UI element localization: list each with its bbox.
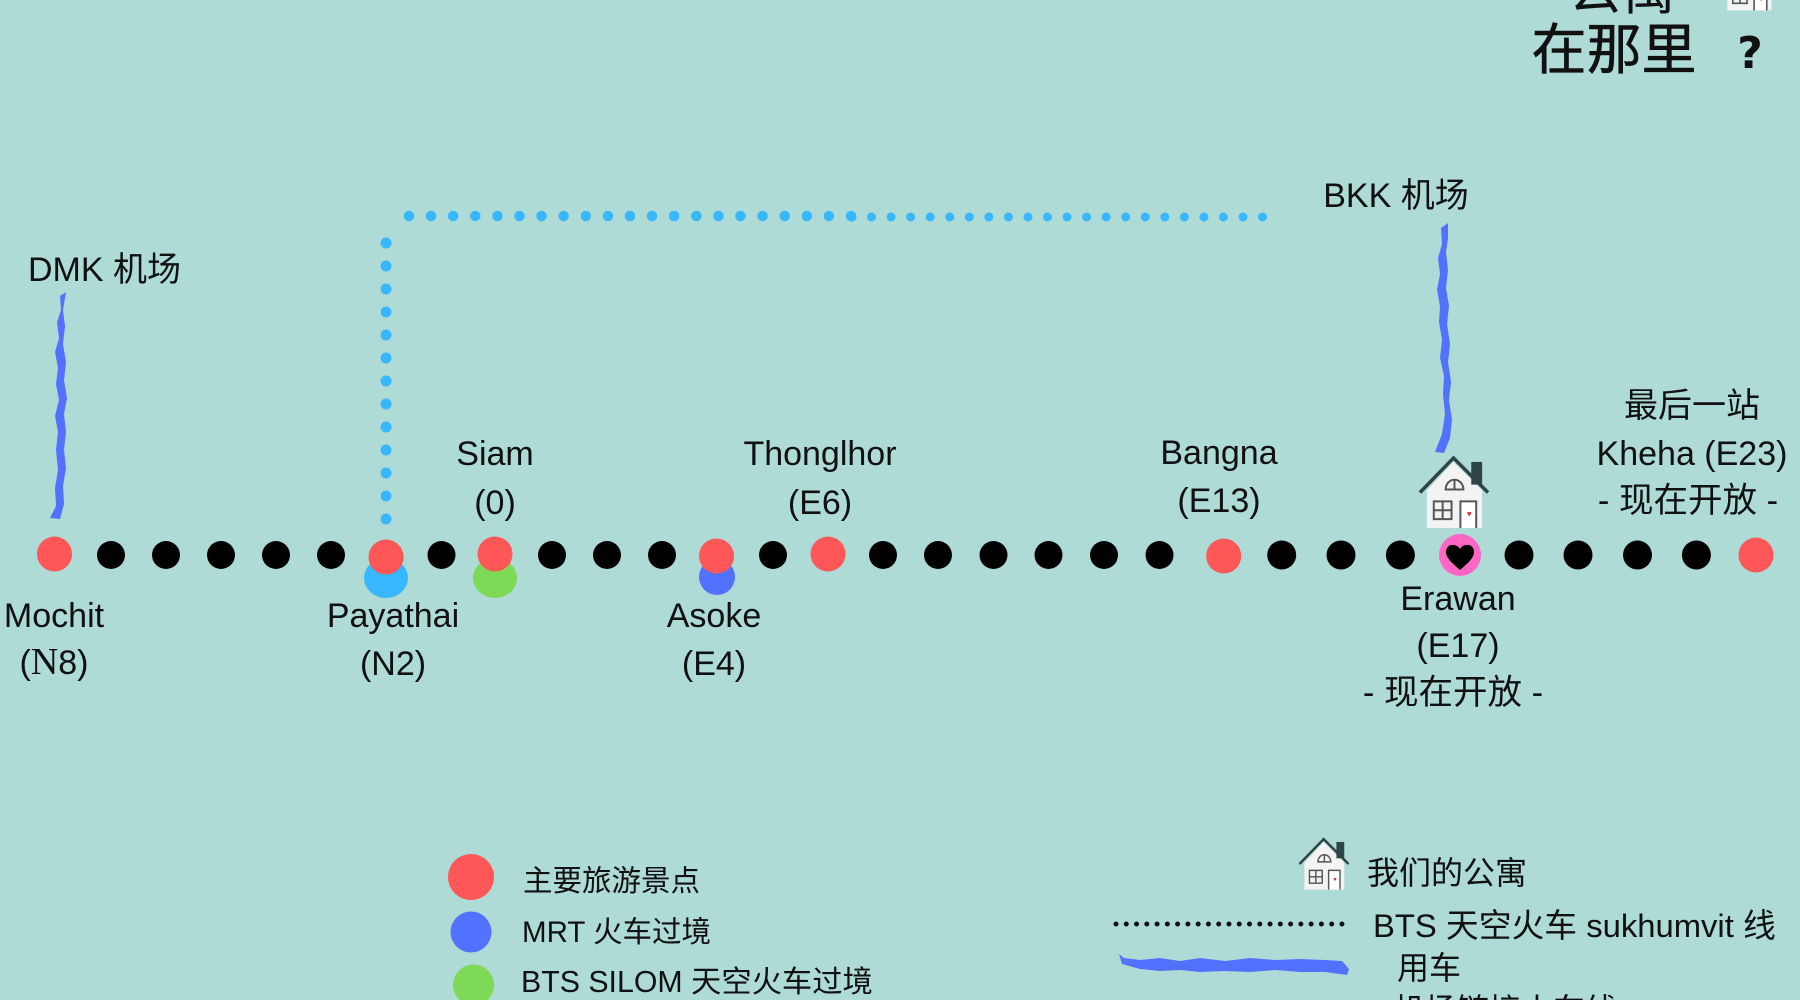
label: Kheha: - 现在开放 - <box>1598 482 1778 520</box>
label: Asoke: Asoke <box>667 597 761 635</box>
legend item: MRT <box>450 912 711 952</box>
label: Mochit <box>4 597 105 683</box>
legend item: BTS Sukhumvit: BTS 天空火车 sukhumvit 线 <box>1373 907 1776 944</box>
legend item: our apartment <box>1299 839 1527 891</box>
title <box>1531 0 1776 81</box>
label: Erawan <box>1363 580 1543 712</box>
label: Bangna: (E13) <box>1177 482 1261 520</box>
label: Asoke <box>667 597 761 683</box>
label: Thonglhor: Thonglhor <box>743 435 897 473</box>
legend item: BTS Silom: BTS SILOM 天空火车过境 <box>521 965 873 999</box>
label: Mochit: (N8) <box>19 641 89 683</box>
label: Bangna: Bangna <box>1160 434 1278 472</box>
legend: right <box>1116 839 1776 1000</box>
legend item: tourist attractions: 主要旅游景点 <box>523 865 700 898</box>
label: Payathai <box>327 597 459 683</box>
label: Siam: Siam <box>456 435 534 473</box>
legend item: our apartment: 我们的公寓 <box>1367 855 1527 891</box>
question mark: ? <box>1737 28 1763 79</box>
label: Mochit: Mochit <box>4 597 105 635</box>
label: Kheha: 最后一站 <box>1624 387 1760 425</box>
transfer markers <box>364 558 735 598</box>
our apartment marker <box>1439 534 1481 576</box>
label: Bangna <box>1160 434 1278 520</box>
title: 在那里 <box>1531 19 1697 81</box>
legend item: tourist attractions <box>448 854 700 900</box>
label: Thonglhor: (E6) <box>788 484 852 522</box>
label: Erawan: Erawan <box>1400 580 1516 618</box>
station line <box>37 536 1774 574</box>
legend item: by car: 用车 <box>1397 950 1461 986</box>
legend item: MRT: MRT 火车过境 <box>522 916 711 949</box>
label: DMK airport: DMK 机场 <box>28 251 181 289</box>
label: Erawan: (E17) <box>1416 627 1500 665</box>
label: Thonglhor <box>743 435 897 522</box>
route: BKK airport wavy line <box>1435 223 1452 453</box>
label: Siam <box>456 435 534 522</box>
label: Kheha <box>1597 387 1787 520</box>
label: Siam: (0) <box>474 484 516 522</box>
label: Erawan: - 现在开放 - <box>1363 674 1543 712</box>
route: DMK airport wavy line <box>50 292 67 519</box>
icon: house above Erawan <box>1420 458 1488 528</box>
label: Kheha: Kheha (E23) <box>1597 435 1787 473</box>
icon: house in title <box>1722 0 1776 10</box>
label: Payathai: Payathai <box>327 597 459 635</box>
route: dotted line to BKK <box>386 216 1263 519</box>
label: BKK airport: BKK 机场 <box>1323 177 1469 215</box>
label: Payathai: (N2) <box>360 645 426 683</box>
legend: left <box>448 854 873 1000</box>
legend item: by car <box>1119 950 1461 986</box>
label: Asoke: (E4) <box>682 645 746 683</box>
